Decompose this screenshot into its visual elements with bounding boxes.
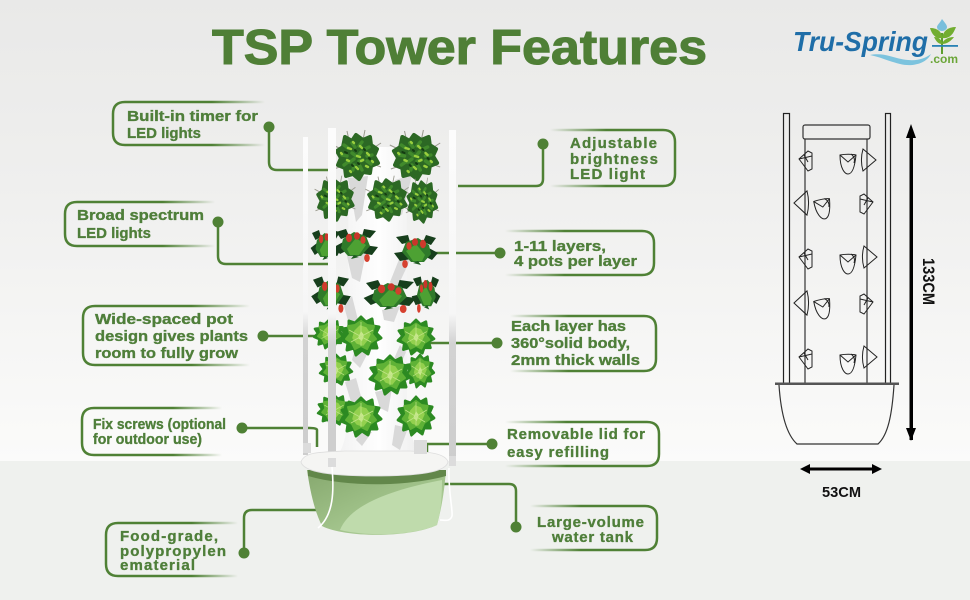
dot (494, 248, 506, 258)
callout: solid body (492, 316, 656, 371)
callout text: Adjustable (570, 135, 657, 152)
strawberry plants, middle layers (311, 229, 440, 313)
callout text: Broad spectrum (77, 207, 204, 224)
tank rim shadow (308, 470, 446, 484)
callout text: Built-in timer for (127, 108, 258, 125)
water tank and lid (301, 440, 456, 535)
callout: wide-spaced pot (83, 306, 268, 365)
callout: water tank (510, 506, 657, 550)
callout text: LED light (570, 166, 645, 183)
callout text: 1-11 layers, (514, 238, 606, 255)
callout text: 2mm thick walls (511, 352, 640, 369)
diagram poles (784, 114, 890, 384)
callout: broad spectrum (65, 202, 224, 246)
callout: layers (494, 231, 654, 275)
tank body (307, 470, 446, 535)
callout text: room to fully grow (95, 345, 238, 362)
dot (486, 438, 498, 450)
dot (258, 330, 268, 342)
dot (538, 138, 548, 150)
callout text: water tank (551, 529, 634, 546)
callout text: 4 pots per layer (514, 253, 637, 270)
callout text: easy refilling (507, 444, 609, 461)
callout text: for outdoor use) (93, 431, 202, 448)
dot (212, 216, 224, 228)
width arrow (800, 464, 882, 474)
logo .com: .com (930, 54, 958, 66)
diagram basin (779, 385, 894, 444)
callout text: ematerial (120, 557, 195, 574)
callout: fix screws (82, 408, 248, 455)
diagram tower (803, 125, 870, 383)
dot (264, 122, 274, 132)
dot (510, 522, 522, 532)
power cords (318, 467, 452, 528)
lid brackets (303, 440, 456, 467)
callout text: Removable lid for (507, 426, 645, 443)
logo plant icon (930, 19, 958, 54)
leader lines behind the tower (218, 127, 543, 553)
diagram pots (794, 149, 877, 374)
front left LED pole (328, 128, 336, 466)
logo: Tru-Spring (793, 19, 958, 66)
height label: 133CM (919, 258, 938, 305)
callout: built-in timer (113, 102, 274, 145)
lighter water area (340, 480, 442, 534)
callout text: LED lights (127, 125, 201, 142)
title: TSP Tower Features (212, 21, 707, 75)
callout text: Wide-spaced pot (95, 311, 233, 328)
lid (301, 451, 448, 476)
tower trunk (340, 147, 418, 452)
logo wordmark: Tru-Spring (793, 26, 928, 57)
dot (238, 548, 250, 558)
callout text: Food-grade, (120, 528, 218, 545)
callout text: polypropylen (120, 543, 226, 560)
height arrow (906, 124, 916, 441)
product photo: tower (311, 130, 440, 452)
callout text: Fix screws (optional (93, 416, 226, 433)
callout text: 360°solid body, (511, 335, 630, 352)
callout text: design gives plants (95, 328, 248, 345)
callout: adjustable brightness (538, 130, 675, 186)
dot (492, 338, 502, 348)
logo wave (870, 54, 931, 65)
callout: food-grade (106, 523, 250, 576)
callout text: brightness (570, 151, 658, 168)
dot (236, 422, 248, 434)
callout text: Each layer has (511, 318, 626, 335)
callout: removable lid (486, 422, 659, 466)
herb foliage, top layers (315, 130, 440, 222)
pot shading on trunk (344, 175, 412, 450)
callout text: LED lights (77, 225, 151, 242)
diagram tray (775, 382, 899, 385)
lettuce plants, lower layers (314, 317, 434, 436)
back left LED pole (303, 137, 308, 455)
dimension line drawing (775, 114, 938, 501)
width label: 53CM (822, 484, 861, 501)
callout text: Large-volume (537, 514, 644, 531)
front right LED pole (449, 130, 456, 464)
